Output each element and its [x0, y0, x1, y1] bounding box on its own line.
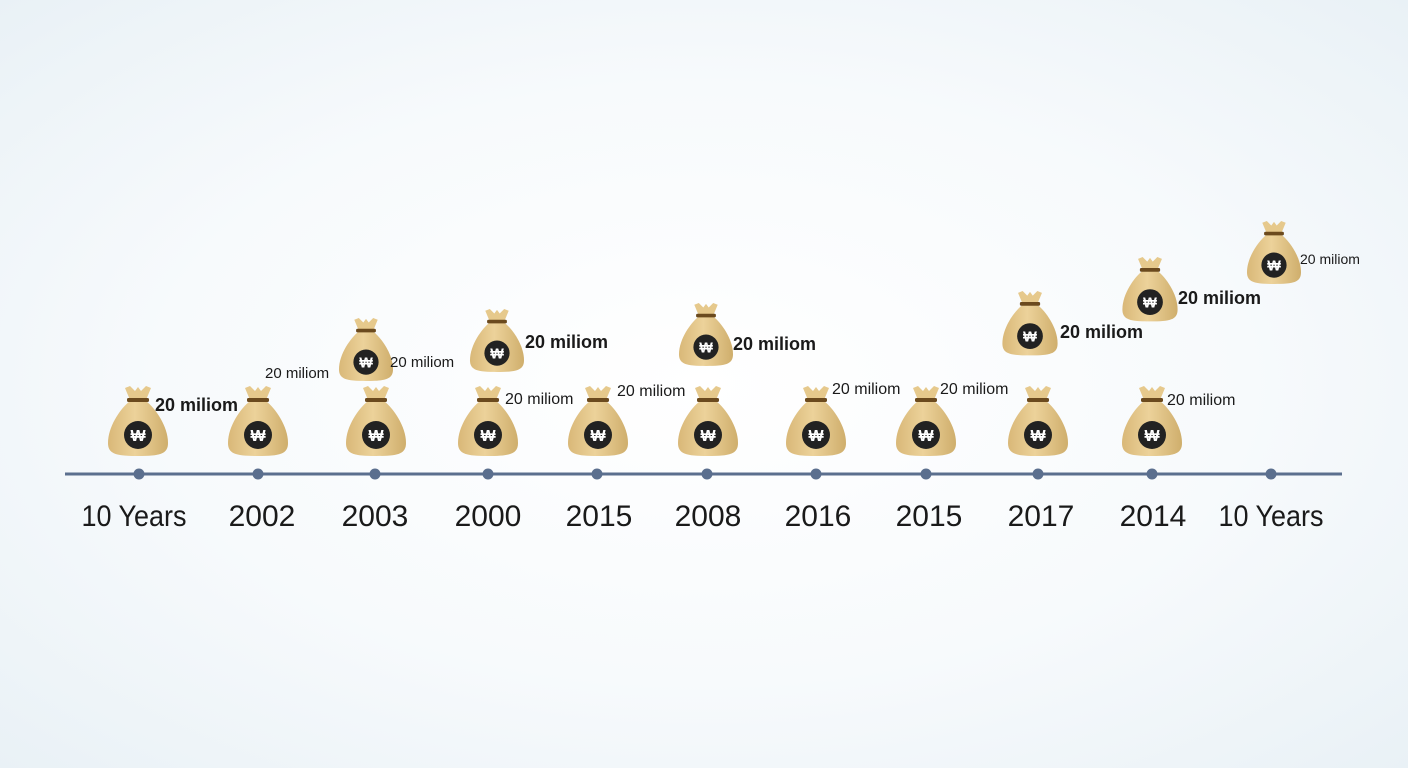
amount labels: 20 miliom — [940, 381, 1008, 398]
year labels: 2017 — [1008, 500, 1074, 533]
amount labels: 20 miliom — [617, 383, 685, 400]
amount labels: 20 miliom — [1167, 392, 1235, 409]
year labels: 2015 — [896, 500, 962, 533]
year labels — [82, 500, 1324, 533]
amount labels: 20 miliom — [525, 332, 608, 352]
year labels: 2003 — [342, 500, 408, 533]
year labels: 2016 — [785, 500, 851, 533]
year labels: 2014 — [1120, 500, 1186, 533]
amount labels: 20 miliom — [733, 334, 816, 354]
amount labels: 20 miliom — [155, 395, 238, 415]
year labels: 10 Years — [82, 500, 186, 533]
year labels: 2015 — [566, 500, 632, 533]
amount labels: 20 miliom — [1300, 251, 1360, 267]
amount labels: 20 miliom — [390, 354, 454, 371]
year labels: 10 Years — [1218, 500, 1324, 533]
money bags lower row — [108, 386, 1182, 456]
year labels: 2000 — [455, 500, 521, 533]
amount labels: 20 miliom — [832, 381, 900, 398]
amount labels: 20 miliom — [505, 391, 573, 408]
amount labels — [155, 251, 1360, 415]
amount labels: 20 miliom — [1178, 288, 1261, 308]
amount labels: 20 miliom — [1060, 322, 1143, 342]
year labels: 2002 — [229, 500, 295, 533]
money bags upper row — [339, 221, 1301, 381]
year labels: 2008 — [675, 500, 741, 533]
timeline axis — [65, 468, 1342, 480]
amount labels: 20 miliom — [265, 365, 329, 382]
